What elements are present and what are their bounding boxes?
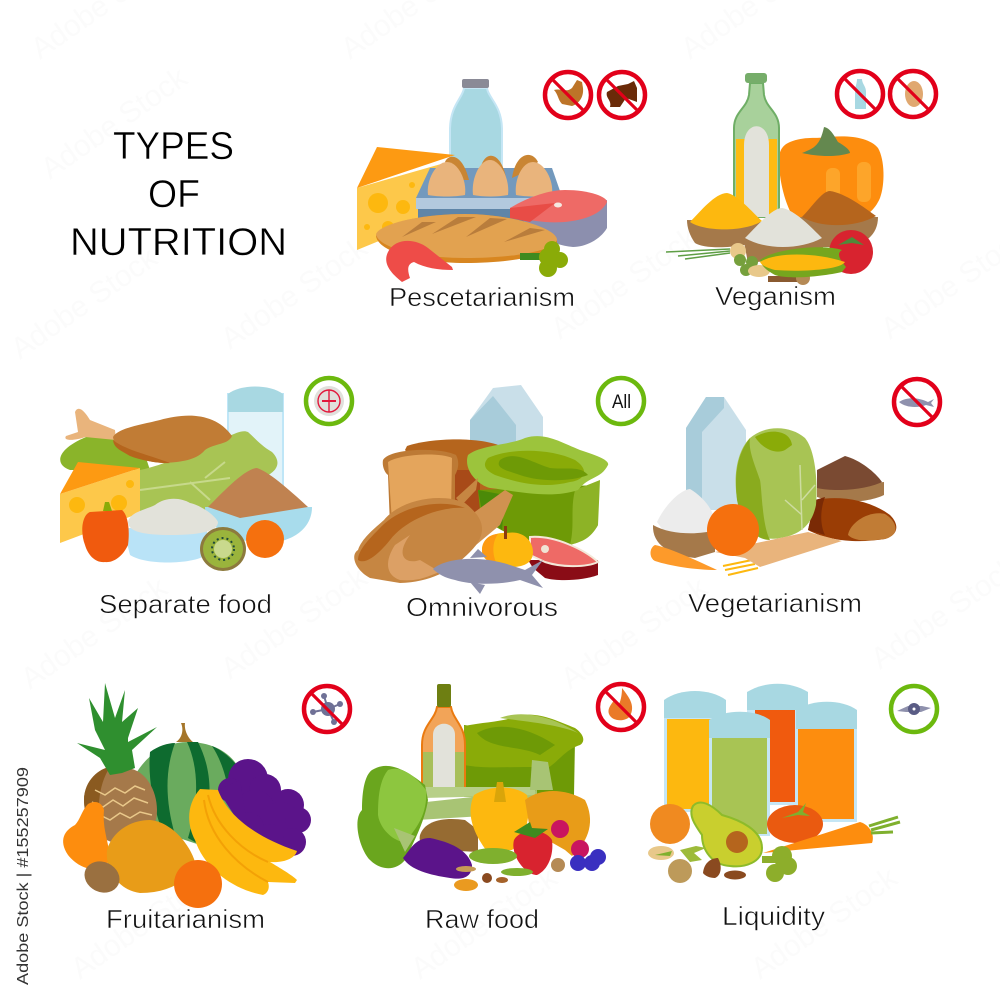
lettuce: [357, 766, 428, 868]
egg tray: [416, 155, 560, 225]
text: Adobe Stock: [5, 241, 164, 366]
avocado: [691, 803, 762, 866]
title: [70, 125, 287, 264]
yellow pepper: [471, 782, 529, 850]
icon: no eggs: [890, 71, 936, 117]
bowl of brown spice: [800, 191, 878, 247]
text: Adobe Stock: [555, 571, 714, 696]
lettuce: [60, 431, 277, 520]
label: Fruitarianism: [106, 904, 265, 934]
napa cabbage: [736, 428, 817, 540]
kiwi: [200, 527, 246, 571]
orange: [246, 520, 284, 558]
icon: no fish: [894, 379, 940, 425]
icon: no poultry: [545, 72, 591, 118]
fish: [433, 549, 543, 594]
orange: [174, 860, 222, 908]
pineapple: [77, 683, 157, 845]
text: Adobe Stock: [545, 221, 704, 346]
shrimp: [386, 241, 453, 282]
glass: red juice: [747, 684, 808, 805]
salmon steak: [510, 190, 607, 247]
milk carton: [470, 385, 543, 448]
panel: pescetarianism: [357, 72, 645, 312]
peas and nuts: [454, 848, 565, 891]
broccoli: [520, 241, 568, 277]
icon: no chemicals: [304, 686, 350, 732]
panel: vegetarianism: [650, 379, 940, 618]
carrot: [650, 545, 717, 570]
potato: [420, 819, 478, 852]
white flour bowl: [653, 489, 715, 558]
label: Omnivorous: [406, 592, 558, 622]
panel: omnivorous: [354, 378, 644, 622]
powder bowl: [205, 468, 312, 543]
label: Separate food: [99, 589, 272, 619]
bowl of rice: [123, 499, 218, 562]
label: Raw food: [425, 904, 539, 934]
glass: green smoothie: [709, 712, 770, 836]
bowl of white flour: [743, 208, 823, 263]
apple: [482, 526, 533, 567]
text: Adobe Stock: [15, 571, 174, 696]
label: Vegetarianism: [688, 588, 862, 618]
panel: raw food: [357, 684, 644, 934]
steak: [528, 537, 598, 580]
oil bottle: [734, 73, 779, 217]
text: Adobe Stock: [35, 61, 194, 186]
sweet potato: [808, 497, 896, 541]
bowl of yellow spice: [687, 193, 762, 247]
title: TYPES: [113, 125, 234, 168]
nuts and seeds: [648, 846, 746, 883]
title: OF: [148, 173, 200, 216]
glass: orange juice: [664, 691, 726, 812]
icon: separate plate: [306, 378, 352, 424]
text: Adobe Stock: [405, 861, 564, 986]
icon: no milk: [837, 71, 883, 117]
label: Pescetarianism: [389, 282, 575, 312]
label: Liquidity: [722, 901, 825, 931]
cheese wedge: [60, 462, 140, 543]
text: Adobe Stock: [215, 561, 374, 686]
berries: [551, 820, 606, 871]
strawberry: [513, 822, 552, 875]
glass: orange drink: [796, 702, 857, 822]
icon: all foods: All: [612, 392, 631, 413]
mango: [107, 820, 195, 893]
glass of milk: [228, 386, 283, 485]
tomato: [829, 230, 873, 274]
panel: veganism: [666, 71, 936, 311]
pasta in paper: [715, 532, 842, 575]
label: Veganism: [715, 281, 836, 311]
brown spice bowl: [817, 456, 884, 502]
milk bottle: [450, 79, 502, 175]
milk carton: [686, 397, 746, 510]
bananas: [189, 789, 297, 895]
orange: [650, 804, 690, 844]
title: NUTRITION: [70, 221, 287, 264]
roast turkey: [354, 478, 513, 583]
cabbage: [464, 714, 583, 797]
watermelon: [135, 723, 242, 845]
celery: [417, 760, 553, 820]
cheese wedge: [357, 147, 455, 250]
broccoli: [762, 846, 797, 882]
text: Adobe Stock: [215, 231, 374, 356]
text: Adobe Stock: [65, 861, 224, 986]
panel: liquidity: [648, 684, 937, 931]
pumpkin: [779, 127, 884, 220]
orange: [707, 504, 759, 556]
text: Adobe Stock: [745, 861, 904, 986]
wine bottle: [422, 684, 465, 790]
icon: no beef: [599, 72, 645, 118]
grapes: [218, 759, 311, 856]
baguette: [376, 214, 557, 263]
bell pepper: [82, 502, 129, 562]
eggplant: [394, 828, 472, 879]
panel: separate food: [60, 378, 352, 619]
corn and nuts: [730, 243, 846, 285]
loaf of bread: [383, 439, 503, 526]
pear: [63, 802, 110, 869]
icon: no fire: [598, 684, 644, 730]
chives: [666, 249, 730, 259]
icon: blender blade: [891, 686, 937, 732]
icon: all foods: [598, 378, 644, 424]
chicken drumstick: [65, 409, 232, 463]
cabbage: [467, 436, 608, 546]
kiwi fruit: [79, 856, 125, 898]
squash: [525, 791, 590, 856]
panel: fruitarianism: [63, 683, 350, 934]
stock credit: Adobe Stock | #155257909: [15, 767, 32, 985]
tomato: [767, 803, 823, 843]
carrot: [763, 817, 900, 853]
